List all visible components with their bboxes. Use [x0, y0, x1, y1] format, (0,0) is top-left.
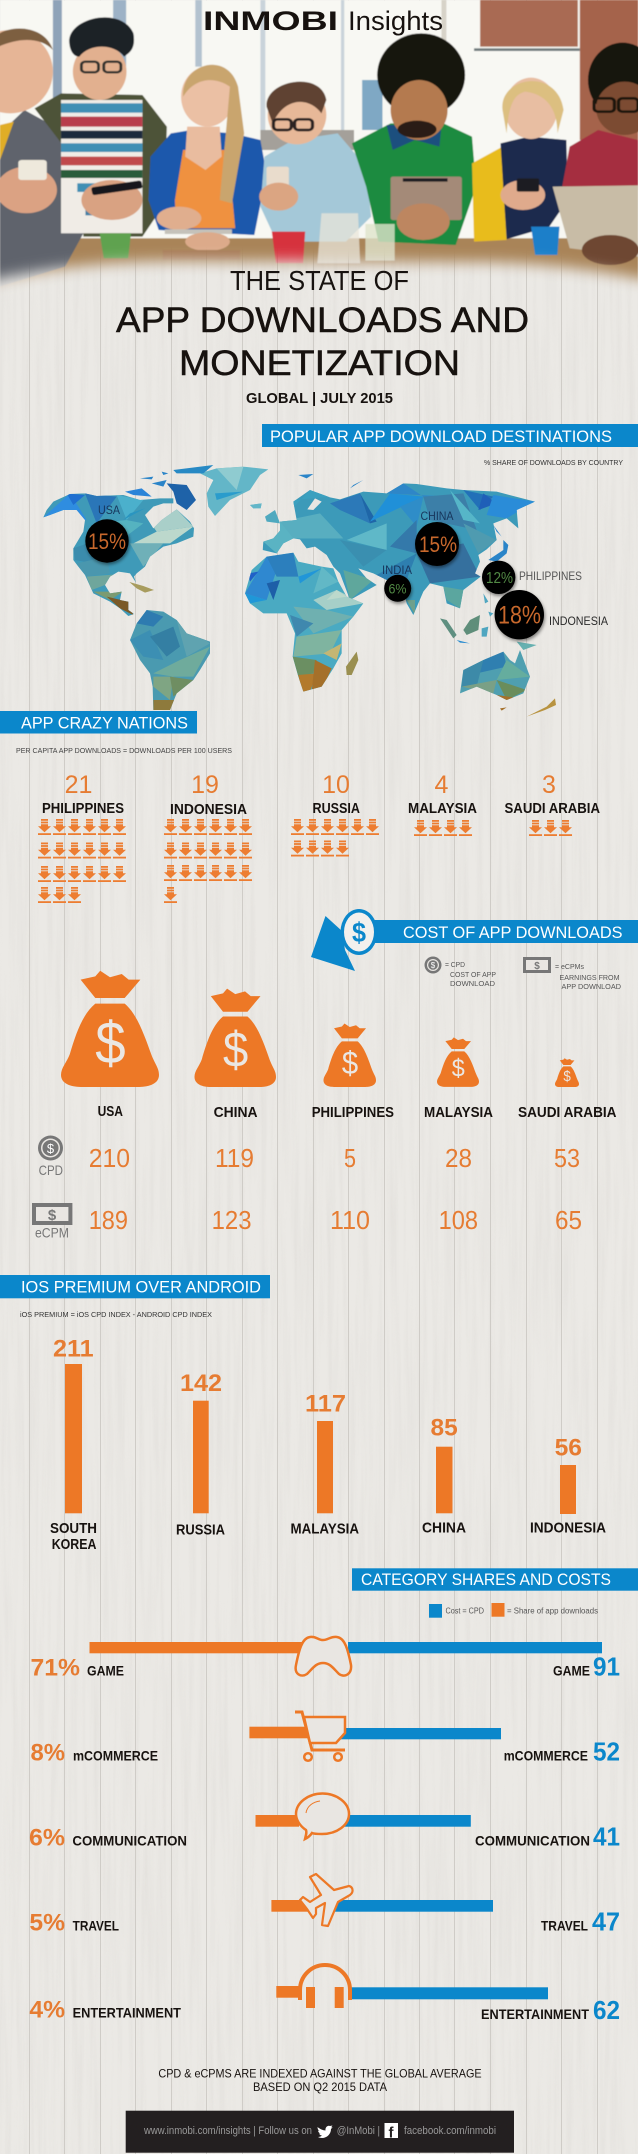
row: travel: 47 — [592, 1907, 620, 1937]
legend: CPD: $ — [431, 961, 436, 970]
world map — [30, 460, 556, 717]
bar: Malaysia 117: 117 — [305, 1391, 346, 1418]
bar: Russia 142 — [176, 1370, 225, 1538]
cost table country labels: SAUDI ARABIA — [518, 1104, 617, 1121]
column: Saudi Arabia 3: SAUDI ARABIA — [504, 800, 600, 817]
callout: Indonesia 18% — [495, 590, 608, 639]
cost per download values: 119 — [215, 1145, 254, 1173]
callout: USA 15%: USA — [98, 503, 120, 517]
banner: popular app download destinations: POPULAR APP DOWNLOAD DESTINATIONS — [270, 427, 612, 446]
column: Indonesia 19: 19 — [191, 771, 219, 799]
title — [116, 265, 529, 407]
row: game: GAME — [87, 1663, 124, 1679]
legend: eCPMs — [523, 957, 621, 991]
bar: China 85: CHINA — [422, 1519, 466, 1536]
row: travel: TRAVEL — [541, 1918, 588, 1934]
money bag: Malaysia — [437, 1037, 479, 1087]
legend: eCPMs: APP DOWNLOAD — [562, 984, 621, 991]
banner: app crazy nations: APP CRAZY NATIONS — [21, 714, 188, 732]
banner: category shares and costs: CATEGORY SHARES AND COSTS — [361, 1570, 611, 1589]
row icon: eCPM: eCPM — [35, 1225, 69, 1241]
callout: Philippines 12%: PHILIPPINES — [519, 569, 582, 583]
icon: game controller — [296, 1637, 351, 1676]
eCPM values: 65 — [555, 1207, 582, 1235]
cost per download values — [89, 1145, 580, 1173]
column: Philippines 21: PHILIPPINES — [42, 800, 124, 817]
row: travel — [29, 1874, 620, 1937]
column: Russia 10 — [291, 771, 379, 856]
bar: Russia 142: 142 — [180, 1370, 222, 1397]
cost table country labels: PHILIPPINES — [312, 1104, 394, 1121]
category legend — [429, 1603, 598, 1618]
money bag: USA — [61, 971, 159, 1087]
column: Saudi Arabia 3 — [504, 771, 600, 836]
iOS premium caption: iOS PREMIUM = iOS CPD INDEX - ANDROID CPD INDEX — [20, 1310, 212, 1319]
icon: headphones — [300, 1965, 350, 2008]
callout: Indonesia 18%: INDONESIA — [549, 614, 608, 628]
callout: Philippines 12%: 12% — [486, 570, 513, 587]
callout: India 6%: INDIA — [382, 563, 412, 577]
row: entertainment: ENTERTAINMENT — [481, 2006, 589, 2022]
money bag: Philippines — [324, 1023, 376, 1087]
column: Russia 10: RUSSIA — [312, 800, 360, 817]
column: Malaysia 4: MALAYSIA — [408, 800, 477, 817]
cost per download values: 210 — [89, 1145, 130, 1173]
row: mCommerce: 52 — [593, 1737, 620, 1767]
eCPM values: 189 — [89, 1207, 128, 1235]
eCPM values — [89, 1207, 582, 1235]
title: MONETIZATION — [179, 344, 460, 383]
callout: India 6% — [382, 563, 412, 602]
row: entertainment: ENTERTAINMENT — [73, 2005, 181, 2021]
row: mCommerce: mCOMMERCE — [504, 1748, 588, 1764]
column: Indonesia 19 — [164, 771, 252, 903]
title: GLOBAL | JULY 2015 — [246, 390, 393, 407]
money bag: Philippines: $ — [342, 1045, 358, 1081]
cost per download values: 5 — [344, 1145, 356, 1173]
callout: China 15% — [415, 509, 459, 566]
per capita caption: PER CAPITA APP DOWNLOADS = DOWNLOADS PER 100 USERS — [16, 746, 232, 755]
cost per download values: 53 — [554, 1145, 580, 1173]
row: mCommerce: mCOMMERCE — [73, 1748, 158, 1764]
bar: Indonesia 56: 56 — [555, 1435, 582, 1462]
row icon: CPD: CPD — [39, 1162, 63, 1178]
bar: Indonesia 56: INDONESIA — [530, 1519, 606, 1536]
footer bar: @InMobi | — [337, 2125, 380, 2137]
legend: CPD: DOWNLOAD — [450, 981, 495, 988]
banner: cost of app downloads with arrow: COST OF APP DOWNLOADS — [403, 923, 622, 942]
row icon: CPD: $ — [47, 1141, 55, 1156]
row: entertainment: 62 — [593, 1995, 620, 2025]
footer bar — [126, 2111, 514, 2153]
row: game: 71% — [30, 1655, 80, 1682]
column: Malaysia 4: 4 — [435, 771, 449, 799]
money bag: Saudi Arabia — [555, 1058, 579, 1087]
callout: USA 15%: 15% — [88, 529, 126, 554]
row: communication: 6% — [29, 1825, 65, 1852]
eCPM values: 123 — [212, 1207, 252, 1235]
icon: facebook: f — [388, 2124, 394, 2142]
bar: South Korea 211 — [50, 1336, 97, 1553]
legend: CPD — [424, 956, 496, 988]
title: APP DOWNLOADS AND — [116, 301, 529, 340]
bar: Malaysia 117 — [290, 1391, 359, 1537]
row: game: 91 — [593, 1652, 620, 1682]
logo: InMobi Insights — [203, 6, 443, 36]
bar: China 85: 85 — [430, 1415, 458, 1442]
legend: eCPMs: EARNINGS FROM — [560, 975, 620, 982]
callout: China 15%: 15% — [419, 532, 457, 557]
legend: CPD: COST OF APP — [450, 972, 496, 979]
icon: facebook — [384, 2123, 398, 2142]
logo: InMobi Insights: Insights — [348, 6, 443, 36]
row: entertainment — [29, 1965, 620, 2025]
column: Indonesia 19: INDONESIA — [170, 801, 247, 818]
legend: eCPMs: $ — [534, 961, 540, 972]
bar: Russia 142: RUSSIA — [176, 1521, 225, 1538]
footnote — [158, 2067, 482, 2094]
title: THE STATE OF — [230, 265, 409, 296]
callout: Philippines 12% — [482, 561, 582, 594]
legend: eCPMs: = eCPMs — [555, 964, 584, 971]
callout: China 15%: CHINA — [420, 509, 454, 523]
category legend: Cost = CPD — [446, 1606, 484, 1616]
cost table country labels: CHINA — [214, 1104, 258, 1121]
callout: Indonesia 18%: 18% — [498, 602, 541, 630]
eCPM values: 108 — [439, 1207, 478, 1235]
row: travel: TRAVEL — [73, 1918, 119, 1934]
footnote: BASED ON Q2 2015 DATA — [253, 2080, 387, 2094]
icon: shopping cart — [295, 1712, 345, 1761]
footer bar: www.inmobi.com/insights | Follow us on — [143, 2125, 312, 2137]
footer bar: facebook.com/inmobi — [404, 2125, 496, 2137]
category legend: = Share of app downloads — [507, 1606, 598, 1616]
row: game — [30, 1637, 620, 1682]
column: Russia 10: 10 — [322, 771, 350, 799]
cost table country labels: MALAYSIA — [424, 1104, 493, 1121]
legend: CPD: = CPD — [445, 962, 465, 969]
bar: South Korea 211: KOREA — [52, 1536, 97, 1553]
icon: airplane — [300, 1874, 353, 1926]
icon: speech bubble — [296, 1794, 349, 1839]
row: communication: COMMUNICATION — [72, 1833, 187, 1849]
map caption: % SHARE OF DOWNLOADS BY COUNTRY — [484, 458, 623, 467]
bar: South Korea 211: 211 — [53, 1336, 94, 1363]
footnote: CPD & eCPMS ARE INDEXED AGAINST THE GLOBAL AVERAGE — [158, 2067, 482, 2081]
banner: cost of app downloads with arrow — [311, 909, 638, 971]
bar: China 85 — [422, 1415, 466, 1536]
banner: iOS premium over Android: IOS PREMIUM OVER ANDROID — [21, 1278, 261, 1297]
row: game: GAME — [553, 1663, 590, 1679]
money bag: China — [194, 989, 276, 1087]
column: Philippines 21: 21 — [65, 771, 92, 799]
row: communication — [29, 1794, 620, 1852]
row icon: CPD — [38, 1136, 63, 1178]
money bag: USA: $ — [95, 1010, 126, 1076]
column: Saudi Arabia 3: 3 — [542, 771, 556, 799]
row: mCommerce: 8% — [30, 1740, 65, 1767]
row: communication: COMMUNICATION — [475, 1833, 590, 1849]
row: entertainment: 4% — [29, 1997, 65, 2024]
logo: InMobi Insights: INMOBI — [203, 6, 338, 36]
money bag: Saudi Arabia: $ — [563, 1068, 571, 1085]
cost table country labels: USA — [98, 1103, 123, 1120]
cost per download values: 28 — [445, 1145, 472, 1173]
money bag: Malaysia: $ — [452, 1054, 465, 1083]
eCPM values: 110 — [330, 1207, 370, 1235]
money bag: China: $ — [223, 1021, 248, 1078]
bar: Indonesia 56 — [530, 1435, 606, 1536]
header photo: people using devices — [0, 0, 638, 300]
bar: South Korea 211: SOUTH — [50, 1520, 97, 1537]
icon: twitter bird — [318, 2126, 333, 2138]
row icon: eCPM — [32, 1203, 72, 1241]
banner: cost of app downloads with arrow: $ — [352, 917, 366, 948]
column: Malaysia 4 — [408, 771, 477, 836]
bar: Malaysia 117: MALAYSIA — [290, 1520, 359, 1537]
row: mCommerce — [30, 1712, 620, 1767]
row icon: eCPM: $ — [48, 1207, 57, 1224]
bar chart: iOS premium — [50, 1336, 606, 1553]
cost table country labels — [98, 1103, 617, 1121]
column: Philippines 21 — [38, 771, 126, 903]
callout: India 6%: 6% — [388, 580, 406, 596]
row: travel: 5% — [29, 1910, 65, 1937]
callout: USA 15% — [85, 503, 129, 563]
row: communication: 41 — [593, 1822, 620, 1852]
